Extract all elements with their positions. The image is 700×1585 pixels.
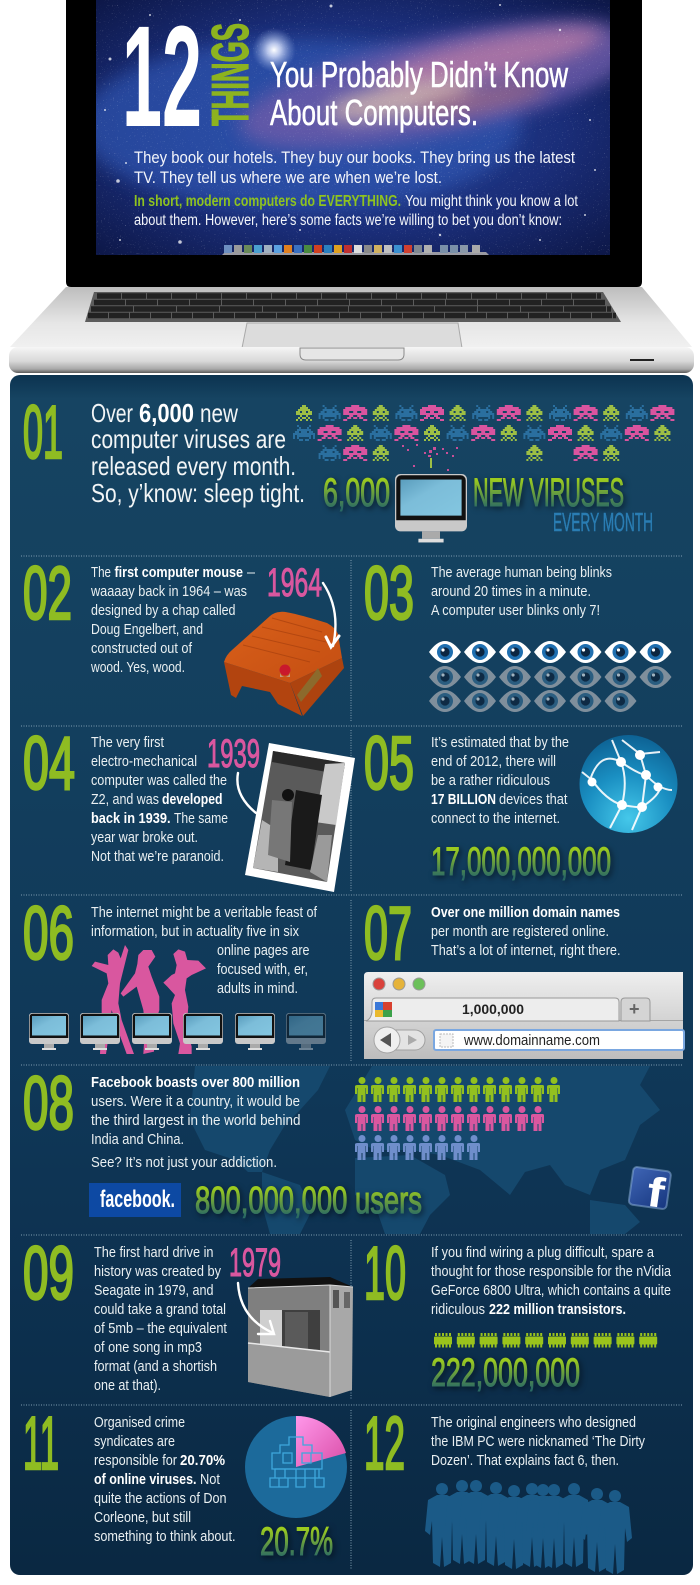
fact text: adults in mind. xyxy=(217,980,298,997)
intro text xyxy=(134,149,579,229)
fact text: It’s estimated that by the xyxy=(431,734,569,751)
6,000 new viruses label xyxy=(323,471,653,537)
fact text: Over one million domain names xyxy=(431,904,620,921)
fact text: Over xyxy=(91,398,133,428)
fact text: A computer user blinks only 7! xyxy=(431,602,600,619)
dock icons xyxy=(222,245,489,255)
fact text: Organised crime xyxy=(94,1414,185,1431)
fact text xyxy=(431,1414,645,1469)
fact text: So, y’know: sleep tight. xyxy=(91,478,305,508)
fact text: format (and a shortish xyxy=(94,1358,217,1375)
number 07: 07 xyxy=(364,891,412,975)
number 04: 04 xyxy=(23,721,75,805)
fact text: computer viruses are xyxy=(91,424,286,454)
fact text: per month are registered online. xyxy=(431,923,609,940)
number 03: 03 xyxy=(364,551,414,635)
intro text: You might think you know a lot xyxy=(405,193,579,210)
6,000 new viruses label: 6,000 xyxy=(323,471,390,515)
fact text: the IBM PC were nicknamed ‘The Dirty xyxy=(431,1433,645,1450)
browser window xyxy=(364,972,684,1059)
monitor illustration xyxy=(395,474,467,542)
fact text: Z2, and was xyxy=(91,791,159,808)
fact text: Not that we’re paranoid. xyxy=(91,848,224,865)
fact text: focused with, er, xyxy=(217,961,308,978)
fact text xyxy=(431,564,612,619)
people pictogram xyxy=(355,1077,560,1160)
address bar: www.domainname.com xyxy=(463,1032,600,1049)
fact text: The very first xyxy=(91,734,165,751)
fact text: developed xyxy=(162,791,222,808)
fact text: computer was called the xyxy=(91,772,227,789)
number 08: 08 xyxy=(23,1061,74,1145)
globe icon xyxy=(580,735,678,833)
panel: fact 02 xyxy=(23,551,344,716)
fact text: new xyxy=(200,398,238,428)
20.7%: 20.7% xyxy=(260,1520,333,1564)
year 1964: 1964 xyxy=(267,561,322,605)
fact text: Seagate in 1979, and xyxy=(94,1282,214,1299)
fact text xyxy=(91,398,305,508)
fact text: ridiculous xyxy=(431,1301,485,1318)
fact text: wood. Yes, wood. xyxy=(90,659,185,676)
panel: fact 01: 01 xyxy=(23,390,63,474)
facebook logo xyxy=(89,1183,181,1217)
fact text: be a rather ridiculous xyxy=(431,772,550,789)
pie chart with invader xyxy=(245,1416,347,1518)
dividers xyxy=(21,556,683,1570)
fact text: first computer mouse xyxy=(114,564,243,581)
panel: fact 12: 12 xyxy=(364,1401,405,1485)
main panel xyxy=(10,375,693,1575)
fact text xyxy=(90,564,256,676)
fact text: connect to the internet. xyxy=(431,810,560,827)
exploding particles xyxy=(402,444,458,471)
fact text: constructed out of xyxy=(91,640,193,657)
number 10: 10 xyxy=(364,1231,406,1315)
fact text xyxy=(91,1074,300,1171)
fact text xyxy=(431,734,569,827)
bezel xyxy=(66,0,642,287)
title: About Computers. xyxy=(270,92,478,133)
facebook icon xyxy=(627,1166,671,1217)
panel: fact 12 xyxy=(364,1401,645,1574)
arrow xyxy=(238,1283,274,1334)
fact text xyxy=(431,1244,672,1318)
laptop with header screen xyxy=(9,0,694,373)
fact text: could take a grand total xyxy=(94,1301,226,1318)
dancing silhouettes xyxy=(92,945,206,1054)
wooden mouse xyxy=(224,612,344,716)
panel: fact 06 xyxy=(23,891,326,1054)
800,000,000 users: 800,000,000 users xyxy=(195,1180,422,1222)
panel: fact 04 xyxy=(23,721,355,892)
panel: fact 05 xyxy=(364,721,678,884)
fact text: responsible for xyxy=(94,1452,177,1469)
fact text: The first hard drive in xyxy=(94,1244,214,1261)
number 06: 06 xyxy=(23,891,74,975)
fact text: Corleone, but still xyxy=(94,1509,191,1526)
fact text: year war broke out. xyxy=(91,829,198,846)
intro text: In short, modern computers do EVERYTHING. xyxy=(134,193,401,210)
transistor chips xyxy=(434,1333,657,1348)
fact text: India and China. xyxy=(91,1131,184,1148)
browser tab xyxy=(366,998,619,1021)
fact text: The average human being blinks xyxy=(431,564,612,581)
year 1939: 1939 xyxy=(207,732,260,776)
fact text: information, but in actuality five in six xyxy=(91,923,299,940)
laptop with header screen: 12 xyxy=(122,0,202,157)
number 02: 02 xyxy=(23,551,72,635)
facebook icon: f xyxy=(644,1168,669,1217)
fact text: If you find wiring a plug difficult, spare a xyxy=(431,1244,655,1261)
fact text: 17 BILLION xyxy=(431,791,496,808)
fact text: The same xyxy=(174,810,228,827)
fact text: – xyxy=(247,564,256,581)
screen xyxy=(80,0,650,255)
fact text: back in 1939. xyxy=(91,810,170,827)
photo of Z2 computer xyxy=(245,743,355,892)
year 1979: 1979 xyxy=(229,1241,281,1285)
facebook logo: facebook. xyxy=(100,1186,175,1213)
panel: fact 11 xyxy=(23,1401,347,1564)
fact text: something to think about. xyxy=(94,1528,236,1545)
fact text: waaaay back in 1964 – was xyxy=(90,583,247,600)
title: You Probably Didn’t Know xyxy=(270,54,569,95)
laptop base xyxy=(9,287,694,373)
back and forward buttons xyxy=(374,1027,425,1053)
browser tab: 1,000,000 xyxy=(462,1001,524,1017)
intro text: TV. They tell us where we are when we’re lost. xyxy=(134,169,442,187)
fact text: the third largest in the world behind xyxy=(91,1112,300,1129)
fact text: online pages are xyxy=(217,942,310,959)
fact text: syndicates are xyxy=(94,1433,175,1450)
fact text: around 20 times in a minute. xyxy=(431,583,591,600)
fact text: Facebook boasts over 800 million xyxy=(91,1074,300,1091)
world map background xyxy=(190,1066,660,1234)
fact text: designed by a chap called xyxy=(91,602,236,619)
panel: fact 08 xyxy=(23,1061,671,1222)
fact text: The xyxy=(91,564,111,581)
fact text: Doug Engelbert, and xyxy=(91,621,203,638)
fact text: of one song in mp3 xyxy=(94,1339,202,1356)
fact text: released every month. xyxy=(91,451,296,481)
fact text: The internet might be a veritable feast of xyxy=(91,904,318,921)
panel: fact 03 xyxy=(364,551,672,712)
fact text: end of 2012, there will xyxy=(431,753,556,770)
number 09: 09 xyxy=(23,1231,74,1315)
fact text: 20.70% xyxy=(180,1452,225,1469)
fact text: of 5mb – the equivalent xyxy=(94,1320,228,1337)
fact text: Dozen’. That explains fact 6, then. xyxy=(431,1452,619,1469)
hard drive machine xyxy=(248,1277,353,1397)
fact text xyxy=(91,904,318,997)
fact text: devices that xyxy=(499,791,568,808)
panel: fact 11: 11 xyxy=(23,1401,59,1485)
fact text: Not xyxy=(200,1471,221,1488)
intro text: about them. However, here’s some facts we’re willing to bet you don’t know: xyxy=(134,212,562,229)
fact text xyxy=(94,1244,228,1394)
title xyxy=(270,54,569,133)
new tab button: + xyxy=(629,999,640,1019)
222,000,000: 222,000,000 xyxy=(431,1351,580,1395)
fact text: 6,000 xyxy=(139,398,194,428)
fact text: electro-mechanical xyxy=(91,753,197,770)
fact text: quite the actions of Don xyxy=(94,1490,226,1507)
new tab button xyxy=(621,998,650,1021)
intro text: They book our hotels. They buy our books. They bring us the latest xyxy=(134,149,575,167)
fact text: 222 million transistors. xyxy=(489,1301,626,1318)
invader rows xyxy=(293,405,674,461)
fact text: of online viruses. xyxy=(94,1471,196,1488)
eyes grid xyxy=(429,641,672,712)
panel: fact 09 xyxy=(23,1231,353,1397)
fact text: That’s a lot of internet, right there. xyxy=(431,942,620,959)
arrow xyxy=(323,583,339,647)
panel: fact 07 xyxy=(364,891,684,1059)
arrow xyxy=(237,773,256,813)
fact text: one at that). xyxy=(94,1377,161,1394)
fact text: history was created by xyxy=(94,1263,221,1280)
panel: fact 01 xyxy=(23,390,674,542)
panel: fact 10 xyxy=(364,1231,672,1395)
fact text: users. Were it a country, it would be xyxy=(91,1093,300,1110)
fact text xyxy=(431,904,620,959)
row of six monitors xyxy=(29,1013,326,1050)
fact text: The original engineers who designed xyxy=(431,1414,636,1431)
address bar xyxy=(434,1030,684,1050)
fact text: See? It’s not just your addiction. xyxy=(91,1154,277,1171)
fact text xyxy=(94,1414,236,1545)
number 05: 05 xyxy=(364,721,414,805)
team silhouette xyxy=(425,1480,632,1574)
fact text xyxy=(91,734,228,865)
